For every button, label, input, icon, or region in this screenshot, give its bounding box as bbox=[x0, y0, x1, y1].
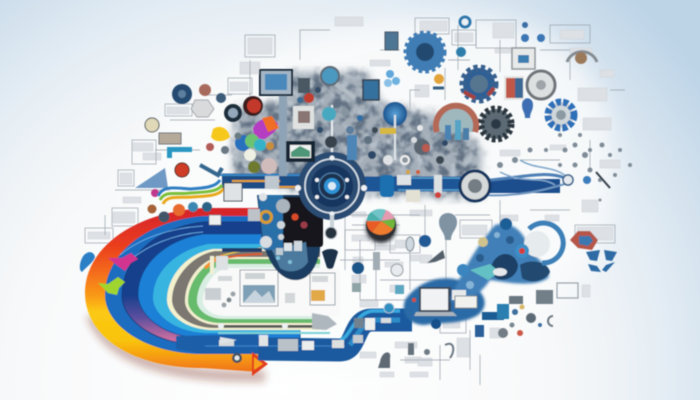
inner arc: cream line bbox=[185, 257, 320, 325]
blue ribbon to lower right bbox=[205, 311, 412, 350]
inner arc: green band bbox=[188, 259, 320, 323]
central hub dial bbox=[295, 152, 367, 235]
colourful icon cluster bbox=[211, 67, 400, 174]
dark control blob bbox=[257, 195, 323, 280]
arc band: blue bbox=[105, 216, 300, 354]
arc interior bbox=[203, 268, 340, 316]
vertical pipe bbox=[277, 83, 333, 176]
left small icons bbox=[135, 84, 242, 222]
pie chart dial bbox=[366, 209, 396, 243]
arc band: red to yellow bbox=[85, 208, 300, 372]
lower-arc small tiles bbox=[210, 256, 337, 330]
arc band: cyan bbox=[153, 244, 300, 333]
bottom band tiles bbox=[219, 335, 344, 351]
recycle icon bbox=[586, 250, 617, 272]
document blocks and connector lines bbox=[85, 17, 632, 385]
illustration bbox=[80, 17, 632, 385]
inner arc: pale line bbox=[197, 264, 320, 319]
mountain picture card bbox=[205, 270, 335, 308]
ribbon tiles bbox=[353, 303, 441, 343]
arc band: navy and purple bbox=[122, 222, 300, 345]
main horizontal pipeline bbox=[220, 160, 568, 197]
arc band: bright blue bbox=[138, 234, 300, 338]
hexagon icon bbox=[570, 231, 598, 250]
knobs column bbox=[209, 176, 364, 274]
rainbow arc arrow bbox=[85, 208, 340, 376]
paper glow behind illustration bbox=[110, 20, 613, 380]
arrow head bbox=[232, 352, 268, 376]
lines running to the arrow bbox=[220, 325, 318, 327]
inner arc: lines bbox=[167, 249, 320, 330]
lightbulb and small icons below hub bbox=[352, 213, 457, 294]
lower-right small icons bbox=[378, 290, 553, 368]
bottom dark-blue band bbox=[176, 334, 258, 354]
thin blue top lines bbox=[120, 226, 203, 265]
lower-right blue cluster bbox=[450, 218, 563, 308]
machinery on right of hub bbox=[368, 125, 610, 202]
gears upper right bbox=[383, 17, 597, 160]
stars on arc bbox=[98, 253, 138, 295]
line bundle heading to the hub bbox=[212, 248, 262, 259]
laptop bbox=[412, 287, 457, 316]
small blue tag bbox=[80, 252, 95, 272]
inner arc: grey band bbox=[172, 251, 320, 328]
mid-blue blob behind laptop bbox=[404, 278, 485, 325]
arc shadow bbox=[92, 315, 265, 376]
central tone blobs bbox=[232, 72, 482, 198]
